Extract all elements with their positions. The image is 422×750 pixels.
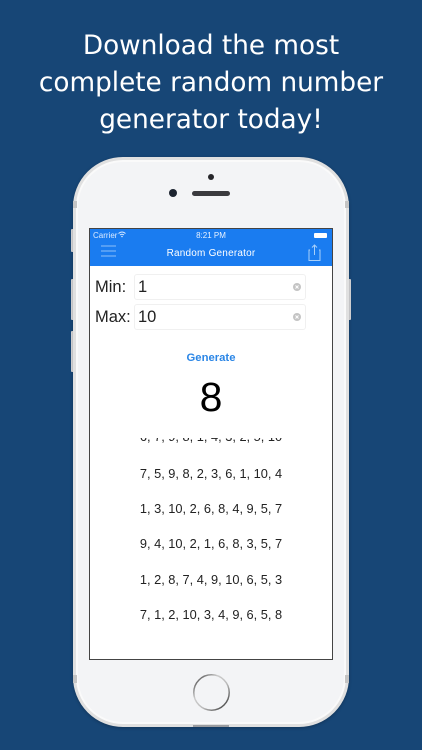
navigation bar bbox=[90, 229, 332, 266]
min clear icon bbox=[293, 283, 301, 291]
title: Download the most bbox=[83, 31, 339, 61]
nav title: Random Generator bbox=[167, 248, 255, 258]
title: generator today! bbox=[99, 105, 323, 135]
row 6: 7, 1, 2, 10, 3, 4, 9, 6, 5, 8 bbox=[140, 607, 282, 622]
home button bbox=[193, 674, 230, 711]
min label: Min: bbox=[95, 278, 126, 296]
menu icon bbox=[101, 246, 116, 256]
max value: 10 bbox=[138, 308, 156, 326]
number history list bbox=[140, 438, 282, 622]
screen bbox=[89, 228, 333, 660]
wifi icon bbox=[118, 232, 126, 238]
row 2: 7, 5, 9, 8, 2, 3, 6, 1, 10, 4 bbox=[140, 466, 282, 481]
title: complete random number bbox=[39, 68, 383, 98]
max clear icon bbox=[293, 313, 301, 321]
max field bbox=[134, 304, 306, 330]
generated number: 8 bbox=[200, 374, 222, 420]
battery icon bbox=[314, 233, 327, 238]
min field bbox=[134, 274, 306, 300]
camera bbox=[169, 189, 177, 197]
title bbox=[39, 31, 384, 135]
side buttons bbox=[71, 229, 351, 372]
row 4: 9, 4, 10, 2, 1, 6, 8, 3, 5, 7 bbox=[140, 536, 282, 551]
phone mockup bbox=[71, 157, 351, 729]
row 5: 1, 2, 8, 7, 4, 9, 10, 6, 5, 3 bbox=[140, 572, 282, 587]
phone body bbox=[73, 157, 349, 727]
status carrier: Carrier bbox=[93, 230, 117, 240]
sensor bbox=[208, 174, 214, 180]
status time: 8:21 PM bbox=[196, 230, 226, 240]
generate button: Generate bbox=[186, 352, 235, 364]
max label: Max: bbox=[95, 308, 131, 326]
share icon bbox=[308, 244, 320, 261]
antenna bands bbox=[73, 201, 349, 727]
row 3: 1, 3, 10, 2, 6, 8, 4, 9, 5, 7 bbox=[140, 501, 282, 516]
earpiece speaker bbox=[192, 191, 230, 196]
min value: 1 bbox=[138, 278, 147, 296]
